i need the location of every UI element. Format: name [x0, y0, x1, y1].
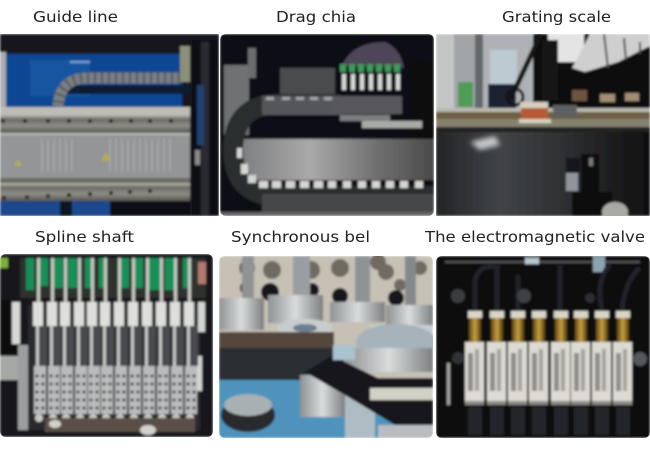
- title: The electromagnetic valve: The electromagnetic valve: [424, 228, 645, 246]
- panel: spline shaft photo: [0, 254, 213, 437]
- panel: guide line photo: [0, 34, 219, 216]
- chain: [233, 104, 434, 196]
- title: Spline shaft: Spline shaft: [35, 228, 134, 246]
- title: Synchronous bel: Synchronous bel: [231, 228, 370, 246]
- panel: drag chain photo: [220, 34, 434, 216]
- title: Grating scale: Grating scale: [502, 8, 611, 26]
- panel: synchronous belt photo: [219, 254, 436, 438]
- title: Drag chia: Drag chia: [276, 8, 356, 26]
- panel: grating scale photo: [436, 34, 650, 222]
- print head carriage: [332, 96, 402, 114]
- drag chain: [58, 78, 180, 106]
- title: Guide line: Guide line: [33, 8, 118, 26]
- plate: [243, 139, 434, 180]
- panel: electromagnetic valve photo: [436, 256, 650, 438]
